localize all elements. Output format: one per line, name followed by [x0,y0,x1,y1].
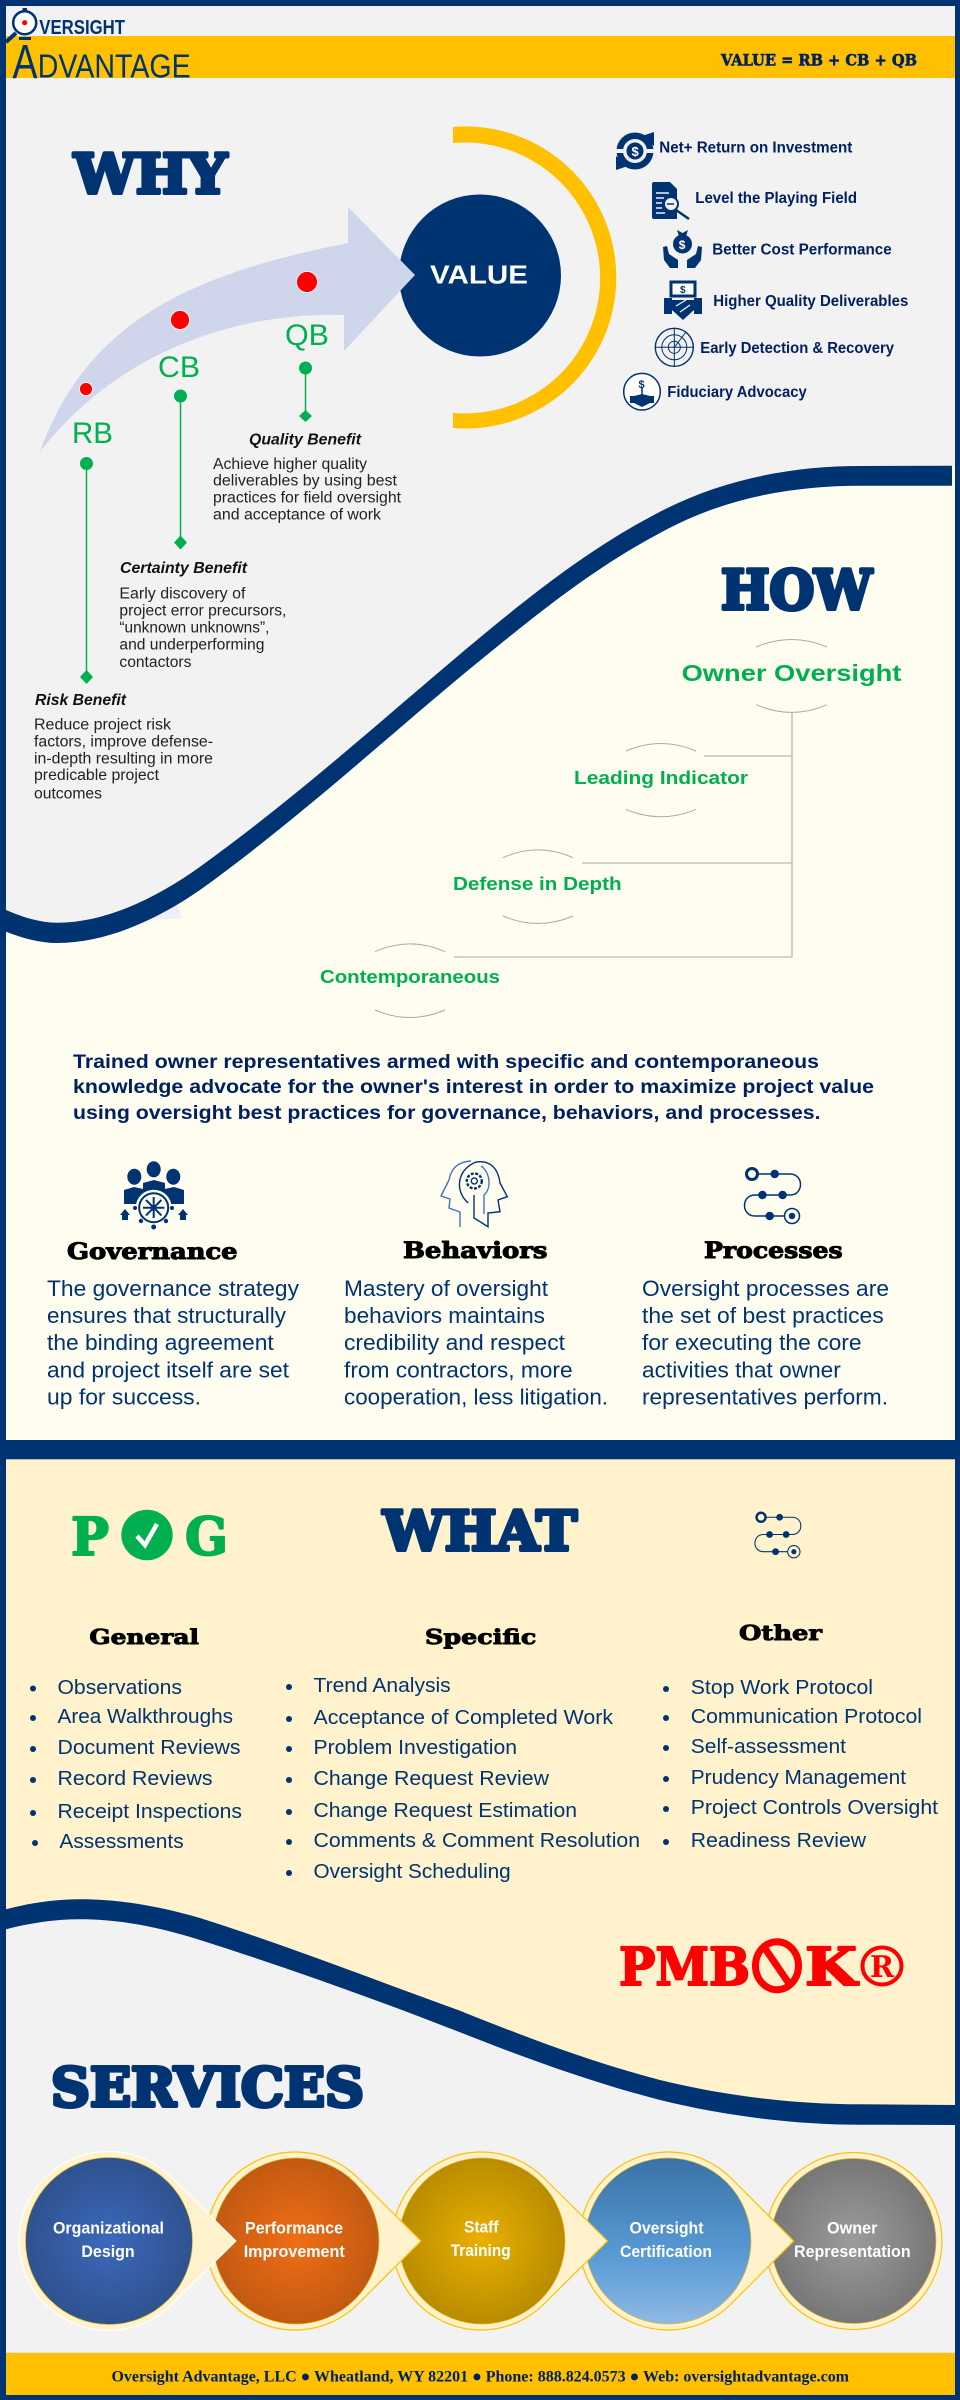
list: other: Self-assessment [691,1735,846,1758]
heading: WHY: WHY [73,142,228,206]
intro paragraph: using oversight best practices for governance, behaviors, and processes. [73,1102,821,1124]
risk benefit marker [72,382,113,684]
service: oversight certification: Oversight [630,2220,704,2238]
icon: return on investment: $ [632,144,640,159]
value circle [399,194,561,356]
node: owner oversight: Owner Oversight [682,660,902,686]
node: leading indicator [574,744,748,817]
text: risk benefit: Reduce project risk [34,716,171,733]
heading: HOW: HOW [721,558,873,622]
wave band: top [6,466,952,943]
list: specific: Change Request Review [314,1767,549,1790]
list: general: Receipt Inspections [58,1800,242,1823]
text: certainty benefit: Certainty Benefit [120,560,248,577]
text: behaviors: cooperation, less litigation. [344,1384,608,1410]
logo: Oversight Advantage: A [12,36,38,89]
icon: governance [120,1161,188,1230]
text: certainty benefit: project error precursors, [119,602,286,620]
text: processes: activities that owner [642,1358,841,1382]
text: governance: the binding agreement [47,1330,275,1355]
text: behaviors: Mastery of oversight [344,1276,549,1301]
heading: processes: Processes [704,1238,843,1264]
label: early detection: Early Detection & Recovery [700,340,894,357]
text: risk benefit [34,692,213,802]
list: specific: Acceptance of Completed Work [314,1706,614,1729]
service: organizational design: Organizational [53,2220,164,2238]
text: quality benefit: Achieve higher quality [213,456,367,473]
list: specific: Comments & Comment Resolution [314,1829,640,1852]
icon: document search [652,182,689,219]
intro paragraph: Trained owner representatives armed with specific and contemporaneous [73,1051,819,1073]
service: performance improvement [206,2152,421,2330]
text: behaviors [344,1276,608,1410]
node: defense in depth: Defense in Depth [453,873,622,894]
text: processes: the set of best practices [642,1303,884,1328]
footer band [6,2352,955,2395]
logo: Oversight Advantage: DVANTAGE [38,48,191,84]
icon: money bag in hands [663,230,702,268]
icon: fiduciary handshake [624,373,660,410]
text: behaviors: credibility and respect [344,1330,566,1355]
text: quality benefit: and acceptance of work [213,506,381,524]
text: certainty benefit: “unknown unknowns”, [119,620,269,636]
text: behaviors: behaviors maintains [344,1303,545,1328]
heading: behaviors: Behaviors [403,1238,548,1264]
list: general: Document Reviews [58,1736,241,1759]
service: oversight certification [579,2152,794,2330]
label: fiduciary advocacy: Fiduciary Advocacy [667,384,807,401]
text: governance: ensures that structurally [47,1303,287,1328]
text: risk benefit: in-depth resulting in more [34,750,213,767]
list: other: Project Controls Oversight [691,1796,938,1819]
text: certainty benefit [119,560,286,671]
how connector tree [454,712,792,957]
heading: specific: Specific [425,1625,536,1649]
logo: POG [71,1507,228,1568]
list: specific: Oversight Scheduling [314,1860,511,1883]
heading: SERVICES: SERVICES [51,2057,364,2119]
yellow arc [453,126,616,429]
node: leading indicator: Leading Indicator [574,767,748,788]
process chain: services [19,2151,942,2330]
text: risk benefit: predicable project [34,767,160,784]
footer band: Oversight Advantage, LLC ● Wheatland, WY 82201 ● Phone: 888.824.0573 ● Web: oversightadvantage.com [112,2369,850,2386]
icon list: value drivers [614,132,908,410]
header band [6,36,955,78]
heading: governance: Governance [67,1239,238,1265]
service: staff training: Staff [464,2218,499,2236]
text: behaviors: from contractors, more [344,1358,573,1382]
list: specific: Trend Analysis [314,1674,451,1697]
text: processes: representatives perform. [642,1384,888,1410]
list: general: Observations [58,1676,182,1699]
service: staff training [392,2152,608,2330]
quality benefit marker [285,272,329,422]
list: other: Readiness Review [691,1829,866,1852]
logo: POG: P [71,1507,109,1568]
text: certainty benefit: Early discovery of [119,586,246,602]
certainty benefit marker: CB [158,351,200,384]
icon: money handshake: $ [680,285,686,296]
service: performance improvement: Performance [245,2220,343,2238]
node: contemporaneous: Contemporaneous [320,966,500,987]
service: owner representation [765,2152,942,2330]
service: organizational design [19,2151,236,2330]
heading: other: Other [739,1621,824,1645]
arrow [40,207,415,452]
text: quality benefit: practices for field oversight [213,490,402,506]
text: risk benefit: outcomes [34,785,102,802]
list: other: Communication Protocol [691,1705,922,1728]
icon: behaviors head [441,1161,507,1227]
icon: small process path [755,1513,801,1558]
text: processes: for executing the core [642,1330,862,1355]
node: contemporaneous [320,944,500,1018]
text: processes [642,1276,889,1410]
icon: fiduciary handshake: $ [638,379,645,391]
text: risk benefit: Risk Benefit [35,692,127,709]
node: defense in depth [453,850,622,924]
logo: PMBOK no-symbol: K [805,1937,859,1998]
list: general: Record Reviews [58,1767,212,1790]
label: higher quality deliverables: Higher Quality Deliverables [713,293,908,310]
text: governance: and project itself are set [47,1358,290,1382]
icon: radar [655,328,693,366]
service: organizational design: Design [81,2243,135,2261]
heading: WHAT: WHAT [382,1499,577,1563]
icon: money bag in hands: $ [679,238,686,252]
value label: VALUE [430,260,528,290]
list: general: Assessments [59,1830,184,1853]
icon: money handshake [664,282,702,320]
list: other: Stop Work Protocol [691,1676,873,1699]
label: level the playing field: Level the Playing Field [695,190,857,207]
list: specific: Change Request Estimation [314,1799,577,1822]
service: owner representation: Representation [794,2243,911,2261]
text: quality benefit: deliverables by using best [213,472,398,490]
logo: PMBOK no-symbol [619,1937,902,1998]
label: net return: Net+ Return on Investment [659,139,853,156]
service: staff training: Training [451,2242,511,2260]
logo: PMBOK no-symbol: R [870,1950,895,1985]
quality benefit marker: QB [285,319,329,352]
list: specific [286,1674,640,1883]
list: other: Prudency Management [691,1766,906,1789]
text: quality benefit: Quality Benefit [249,432,362,448]
divider band [0,1440,960,1459]
service: owner representation: Owner [827,2220,878,2238]
logo: Oversight Advantage [6,8,191,89]
list: other [663,1676,938,1852]
lavender arrow remnant [147,902,183,920]
text: quality benefit [213,432,402,524]
risk benefit marker: RB [72,417,113,450]
certainty benefit marker [158,310,200,550]
wave band: bottom [6,1899,955,2125]
text: certainty benefit: and underperforming [119,636,264,654]
icon: return on investment [614,132,656,170]
value equation: VALUE = RB + CB + QB [720,51,917,70]
intro paragraph: knowledge advocate for the owner's interest in order to maximize project value [73,1076,874,1098]
text: governance: up for success. [47,1384,201,1410]
heading: general: General [89,1625,199,1649]
intro paragraph [73,1051,874,1124]
list: general: Area Walkthroughs [58,1705,233,1728]
text: certainty benefit: contactors [119,654,192,671]
node: owner oversight [682,640,902,712]
list: specific: Problem Investigation [314,1736,517,1759]
logo: POG: G [185,1507,228,1568]
text: risk benefit: factors, improve defense- [34,734,213,751]
service: performance improvement: Improvement [244,2243,345,2261]
label: better cost performance: Better Cost Performance [712,241,892,258]
icon: processes path [744,1168,800,1224]
service: oversight certification: Certification [620,2243,712,2261]
logo: Oversight Advantage: VERSIGHT [39,16,125,39]
text: processes: Oversight processes are [642,1276,889,1301]
logo: PMBOK no-symbol: PMB [619,1937,750,1998]
text: governance: The governance strategy [47,1276,300,1301]
list: general [30,1676,242,1853]
text: governance [47,1276,300,1410]
